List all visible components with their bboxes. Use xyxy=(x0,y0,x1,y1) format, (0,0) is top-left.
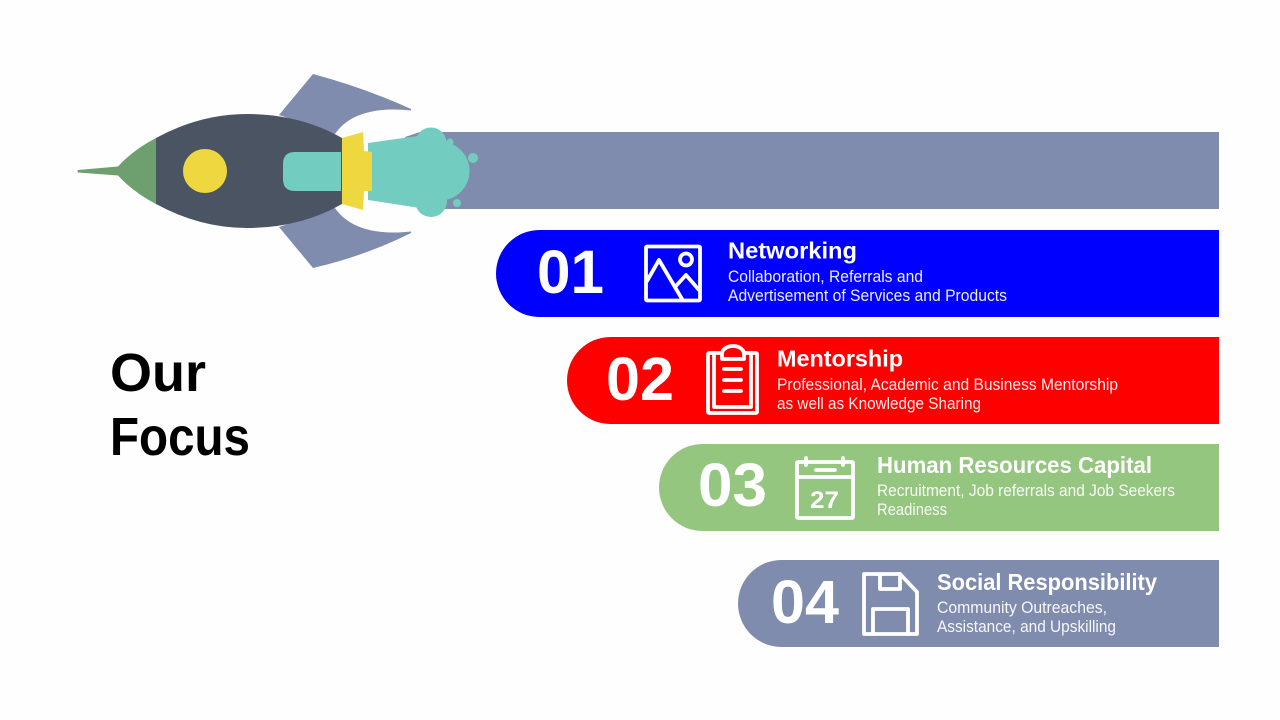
panel: 03 Human Resources Capital xyxy=(659,444,1219,531)
icon: picture xyxy=(646,246,700,300)
rocket flame xyxy=(368,128,478,217)
rocket top fin xyxy=(279,74,411,134)
panel: 02 Mentorship xyxy=(567,337,1219,424)
panel: 01 Networking xyxy=(496,230,1219,317)
number 03: 03 xyxy=(698,451,767,519)
rocket nozzle xyxy=(342,132,372,210)
description: Human Resources Capital: Readiness xyxy=(877,501,947,519)
description: Mentorship xyxy=(777,376,1118,413)
heading: Social Responsibility: Social Responsibility xyxy=(937,569,1157,595)
description: Mentorship: as well as Knowledge Sharing xyxy=(777,395,981,413)
heading: Mentorship: Mentorship xyxy=(777,346,903,372)
icon: calendar xyxy=(797,458,853,518)
panel: 04 Social Responsibility xyxy=(738,560,1219,647)
heading: Networking: Networking xyxy=(728,238,857,264)
title: Our xyxy=(110,343,206,403)
heading: Human Resources Capital: Human Resources Capital xyxy=(877,452,1152,478)
icon: rocket xyxy=(78,74,478,268)
rocket nose cone xyxy=(78,138,156,204)
number 04: 04 xyxy=(771,568,839,636)
title xyxy=(110,343,250,467)
description: Social Responsibility: Community Outreaches, xyxy=(937,599,1107,617)
description: Social Responsibility xyxy=(937,599,1116,636)
description: Mentorship: Professional, Academic and Business Mentorship xyxy=(777,376,1118,394)
number 01: 01 xyxy=(537,238,604,306)
icon: clipboard xyxy=(708,346,757,413)
rocket trail bar xyxy=(405,132,1219,209)
icon: floppy disk xyxy=(864,574,917,634)
icon: calendar: 27 xyxy=(810,487,839,514)
description: Networking xyxy=(728,268,1007,305)
number 02: 02 xyxy=(606,345,674,413)
description: Networking: Advertisement of Services and Products xyxy=(728,287,1007,305)
description: Human Resources Capital xyxy=(877,482,1175,519)
description: Human Resources Capital: Recruitment, Job referrals and Job Seekers xyxy=(877,482,1175,500)
rocket bottom fin xyxy=(279,208,411,268)
rocket window xyxy=(183,149,227,193)
description: Social Responsibility: Assistance, and Upskilling xyxy=(937,618,1116,636)
rocket body xyxy=(156,114,342,228)
rocket inner tube xyxy=(283,152,341,191)
description: Networking: Collaboration, Referrals and xyxy=(728,268,923,286)
title: Focus xyxy=(110,407,250,467)
